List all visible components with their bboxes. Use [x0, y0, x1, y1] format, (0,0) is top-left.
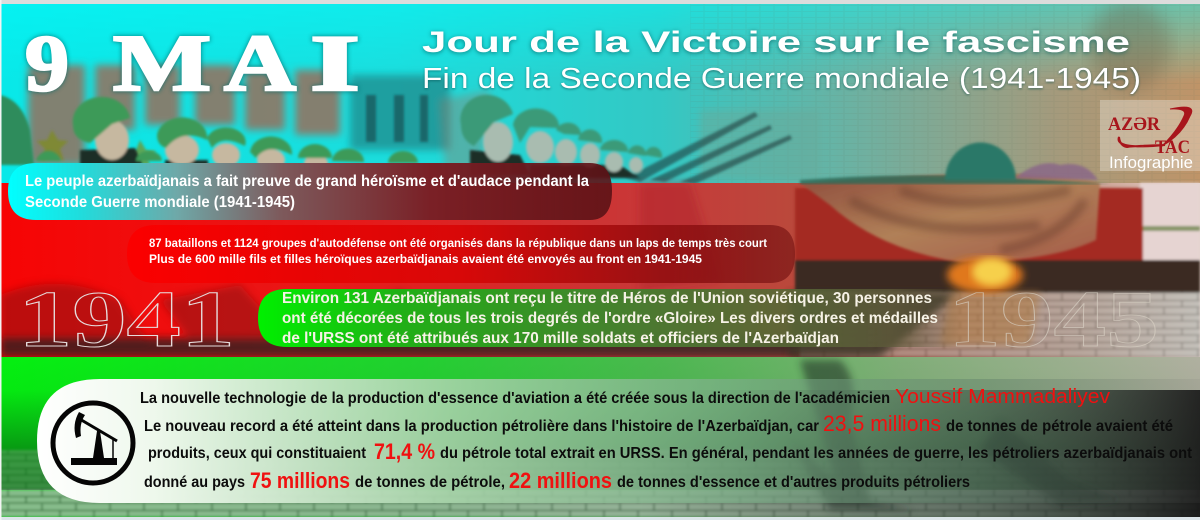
- logo: AZERTAC Infographie: Infographie: [1109, 153, 1193, 172]
- text: battalions: Plus de 600 mille fils et filles héroïques azerbaïdjanais avaient été envoyés au front en 1941-1945: [149, 252, 702, 266]
- heading: 9 MAI: M: [113, 20, 211, 108]
- heading: 9 MAI: A: [224, 20, 296, 108]
- text: aviation fuel: Youssif Mammadaliyev: [895, 386, 1110, 408]
- text: heroism: Seconde Guerre mondiale (1941-1945): [25, 194, 295, 211]
- text: wartime totals: [144, 468, 970, 493]
- heading: Jour de la Victoire: Jour de la Victoire sur le fascisme: [422, 27, 1130, 60]
- text: aviation fuel: [140, 386, 1110, 408]
- panel: top teal band: [0, 0, 1200, 184]
- text: heroism: [25, 173, 589, 211]
- logo: AZERTAC Infographie: TAC: [1155, 137, 1190, 158]
- panel: green band: [0, 357, 1200, 520]
- outlined year 1941: 1941: [18, 276, 235, 364]
- subtitle: Fin de la Seconde Guerre mondiale (1941-1945): [422, 64, 1141, 96]
- subtitle: Fin de la Seconde Guerre mondiale (1941-1945): [422, 63, 1141, 95]
- text: battalions: [149, 236, 767, 266]
- heading: 9 MAI: M: [113, 20, 211, 108]
- heading: 9 MAI: A: [224, 20, 296, 108]
- text: heroism: Le peuple azerbaïdjanais a fait preuve de grand héroïsme et d'audace pendant la: [25, 173, 589, 190]
- text: wartime totals: 22 millions: [509, 468, 612, 493]
- text: heroes: de l'URSS ont été attribués aux 170 mille soldats et officiers de l'Azerbaïdjan: [282, 330, 839, 347]
- text: oil record: [144, 411, 1173, 436]
- text: heroes: [282, 290, 938, 347]
- text: oil record: 23,5 millions: [823, 411, 941, 436]
- text: wartime totals: de tonnes de pétrole,: [355, 474, 505, 491]
- panel: heroes callout: [258, 289, 960, 347]
- panel: red band: [0, 183, 1200, 357]
- heading: 9 MAI: 9: [25, 20, 69, 108]
- text: oil record: de tonnes de pétrole avaient été: [946, 418, 1173, 435]
- monument with draped flag, helmet and eternal flame: [790, 142, 1200, 357]
- heading: 9 MAI: [25, 20, 360, 108]
- text: heroes: ont été décorées de tous les trois degrés de l'ordre «Gloire» Les divers ordres et médailles: [282, 310, 938, 327]
- text: heroes: Environ 131 Azerbaïdjanais ont reçu le titre de Héros de l'Union soviétique, 30 personnes: [282, 290, 932, 307]
- text: aviation fuel: La nouvelle technologie de la production d'essence d'aviation a été créée sous la direction de l'académicien: [140, 390, 890, 407]
- outlined year 1945: 1945: [948, 276, 1159, 364]
- heading: 9 MAI: 9: [25, 20, 69, 108]
- icon: oil pump: [53, 403, 133, 483]
- text: share of USSR oil: produits, ceux qui constituaient: [148, 445, 366, 462]
- heading: 9 MAI: I: [310, 20, 360, 108]
- text: wartime totals: de tonnes d'essence et d'autres produits pétroliers: [617, 474, 970, 491]
- heading: 9 MAI: I: [310, 20, 360, 108]
- soldiers parade photo: [0, 95, 792, 184]
- text: oil record: Le nouveau record a été atteint dans la production pétrolière dans l'histoire de l'Azerbaïdjan, car: [144, 418, 819, 435]
- logo: AZERTAC Infographie: AZƏR: [1108, 114, 1160, 135]
- panel: battalions callout: [127, 225, 795, 283]
- text: battalions: 87 bataillons et 1124 groupes d'autodéfense ont été organisés dans la république dans un laps de temps très court: [149, 236, 767, 250]
- panel: heroism callout: [8, 163, 612, 220]
- text: wartime totals: donné au pays: [144, 474, 245, 491]
- heading: Jour de la Victoire: Jour de la Victoire sur le fascisme: [422, 26, 1130, 59]
- text: wartime totals: 75 millions: [250, 468, 350, 493]
- logo: AZERTAC Infographie: [1100, 100, 1200, 172]
- panel: oil production callout: [37, 379, 1200, 503]
- text: share of USSR oil: [148, 439, 1192, 464]
- heading: Jour de la Victoire: [422, 26, 1130, 60]
- text: share of USSR oil: 71,4 %: [374, 439, 435, 464]
